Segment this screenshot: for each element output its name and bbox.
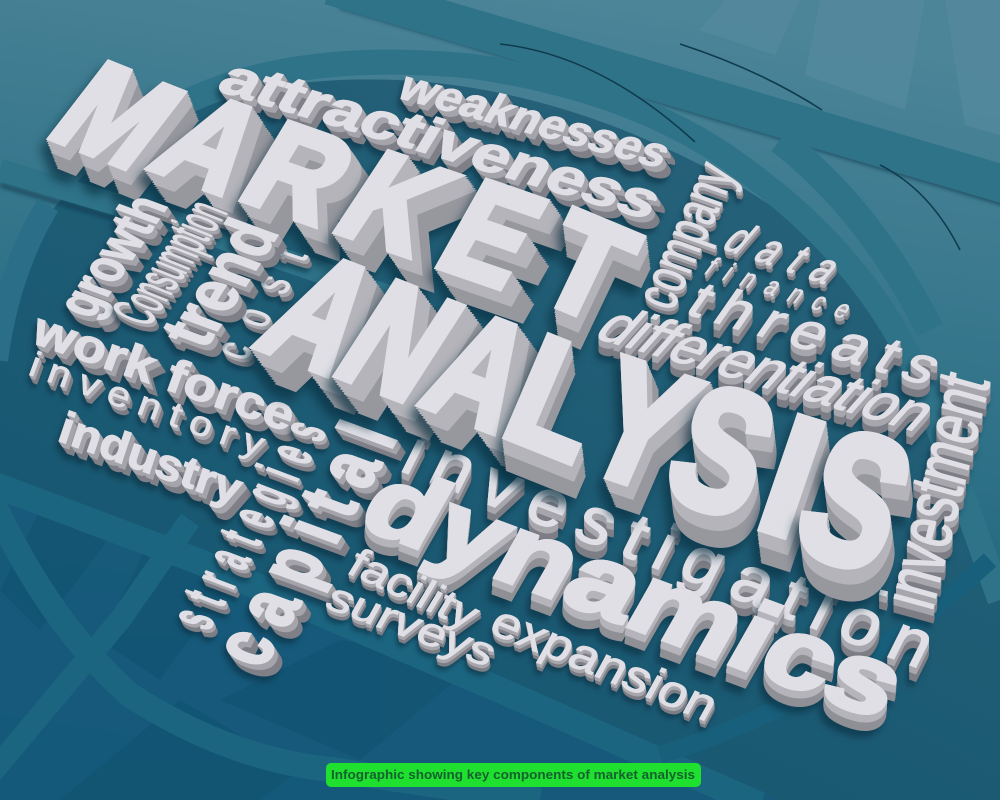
word: finance: finance [699, 253, 870, 328]
word: differentiation: differentiation [583, 297, 951, 442]
title word: MARKET [26, 36, 656, 352]
word: company: company [621, 154, 748, 316]
letter R: R [220, 96, 378, 250]
word: cost: cost [202, 222, 329, 365]
lower panels [0, 510, 480, 800]
letter L: L [484, 302, 630, 495]
word: expansion: expansion [482, 597, 726, 731]
word: facility: facility [340, 540, 488, 638]
band shadows [0, 6, 1000, 235]
letter N: N [310, 251, 488, 433]
word: dynamics: dynamics [344, 445, 925, 739]
caption pill [326, 763, 701, 787]
letter A: A [129, 67, 296, 219]
letter T: T [518, 182, 656, 352]
word: attractiveness: attractiveness [209, 48, 673, 230]
letter K: K [312, 126, 478, 282]
caption pill: Infographic showing key components of market analysis [331, 768, 695, 782]
letter Y: Y [560, 324, 720, 527]
letter E: E [416, 151, 568, 316]
thin dark curve lines [500, 44, 960, 250]
letter A: A [402, 280, 559, 463]
word: threats: threats [676, 272, 965, 399]
word: inventory: inventory [24, 345, 279, 468]
straight and arc bands [0, 0, 1000, 600]
title word: ANALYSIS [233, 222, 937, 612]
word: Consumption: Consumption [98, 192, 240, 333]
word: strategies: strategies [157, 401, 347, 637]
letter A: A [233, 222, 410, 405]
letter S: S [773, 387, 937, 612]
letter S: S [646, 345, 799, 556]
word: surveys: surveys [319, 574, 505, 675]
word: capital: capital [193, 399, 421, 676]
word: weaknesses: weaknesses [389, 62, 680, 177]
word: investigation: investigation [391, 416, 960, 687]
word: work force: work force [26, 302, 302, 442]
word: trend: trend [143, 209, 295, 355]
recessed panels top right [700, 0, 1000, 135]
letter M: M [26, 36, 209, 194]
word: growth: growth [42, 187, 181, 324]
word: industry: industry [53, 402, 249, 514]
letter I: I [740, 380, 843, 573]
word: data: data [712, 216, 865, 297]
